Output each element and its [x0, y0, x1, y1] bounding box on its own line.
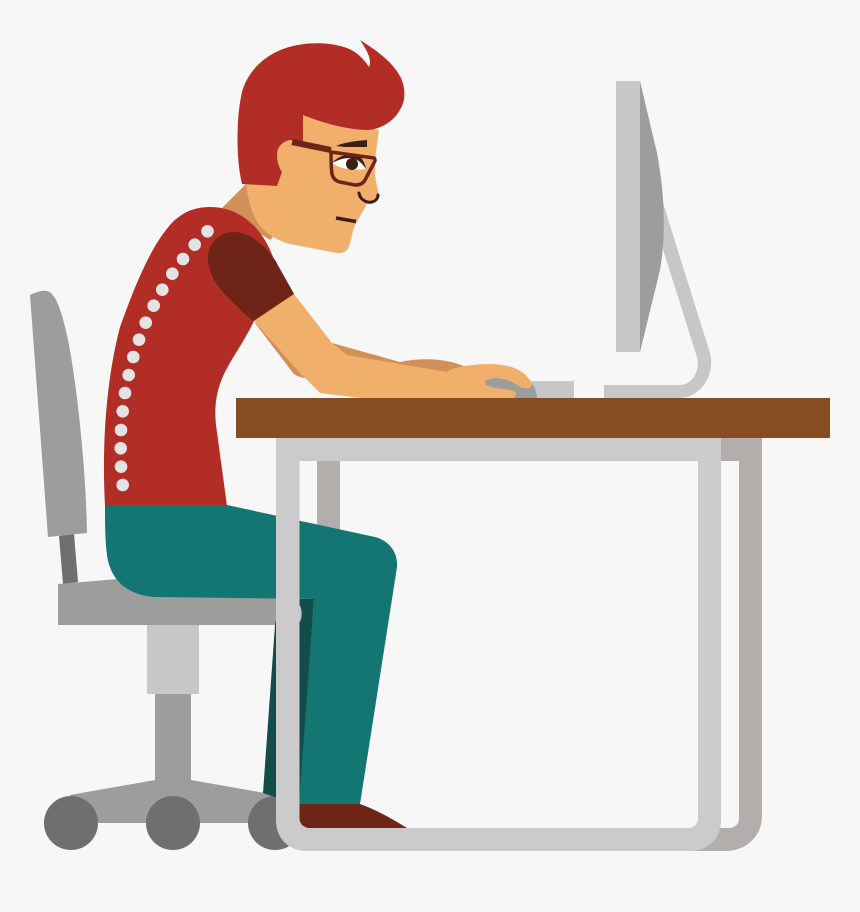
chair seat: [58, 579, 302, 625]
spine dots: [114, 225, 214, 491]
near arm and hand: [254, 294, 532, 400]
shirt: [104, 207, 294, 506]
eyebrow: [336, 140, 367, 147]
desk top: [236, 398, 830, 438]
chair lift sleeve: [147, 625, 199, 694]
chair backrest post: [59, 534, 78, 584]
hair: [238, 40, 404, 186]
mouth: [336, 218, 356, 222]
desk front frame: [276, 438, 721, 851]
glasses: [292, 142, 375, 185]
chair column: [155, 694, 191, 784]
chair wheels: [44, 796, 302, 850]
neck: [222, 183, 285, 240]
monitor screen: [616, 81, 640, 352]
monitor: [604, 81, 711, 398]
trousers: [105, 505, 397, 804]
eye: [332, 154, 366, 170]
man: [104, 40, 537, 828]
mouse: [485, 378, 537, 399]
desk rear frame: [317, 438, 762, 851]
mouse pad: [530, 381, 574, 399]
nose: [359, 193, 378, 202]
office chair: [30, 291, 302, 850]
far leg: [263, 599, 314, 806]
chair base: [70, 780, 276, 823]
shoe: [296, 804, 407, 828]
far arm: [332, 343, 466, 376]
chair backrest: [30, 291, 87, 537]
sleeve: [208, 232, 294, 321]
monitor back: [640, 81, 664, 352]
ear: [277, 140, 304, 172]
face: [246, 115, 379, 253]
seat edge bump: [299, 604, 302, 623]
monitor stand: [604, 203, 711, 398]
arm shadow: [255, 320, 312, 378]
